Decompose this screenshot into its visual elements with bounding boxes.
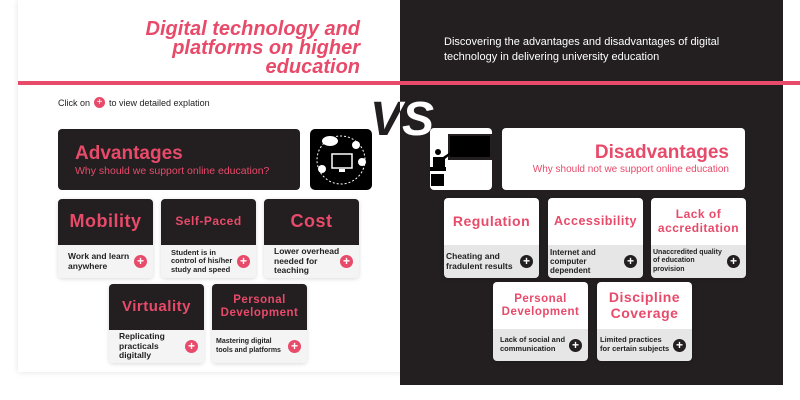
text: Cost (290, 211, 332, 231)
text: Unaccredited quality of education provision (653, 249, 722, 273)
VS: VS (370, 93, 434, 146)
disadvantages header (502, 128, 745, 190)
instruction: Click on to view detailed explation (58, 98, 210, 108)
dark panel (400, 0, 783, 385)
advantage cards: + (137, 254, 144, 268)
text: Replicating practicals digitally (119, 331, 165, 360)
advantage cards: Work and learn anywhere (68, 251, 129, 270)
text: Lower overhead needed for teaching (274, 246, 339, 275)
text: + (627, 254, 634, 268)
advantage cards (58, 199, 153, 278)
text: Limited practices for certain subjects (600, 335, 669, 353)
disadvantage cards: + (523, 254, 530, 268)
disadvantages header: Why should not we support online education (533, 164, 729, 175)
disadvantages header: Disadvantages (595, 142, 729, 163)
text: + (240, 254, 247, 268)
pink divider line (18, 81, 800, 85)
text: Self-Paced (175, 214, 242, 228)
text: Virtuality (122, 298, 191, 315)
VS: VS (370, 93, 434, 146)
text: Student is in control of his/her study and speed (171, 248, 232, 274)
text: Mastering digital tools and platforms (216, 338, 281, 354)
advantages header: Advantages (75, 143, 183, 164)
text: + (343, 254, 350, 268)
text: + (730, 254, 737, 268)
disadvantage cards: Cheating and fradulent results (446, 251, 513, 270)
text: Accessibility (554, 214, 637, 228)
text: + (676, 338, 683, 352)
text: Lack of accreditation (658, 207, 739, 234)
instruction: + (97, 97, 102, 108)
text: + (188, 339, 195, 353)
subtitle: Discovering the advantages and disadvantages of digital technology in delivering university education (444, 36, 719, 63)
advantages header: Why should we support online education? (75, 165, 269, 177)
text: Personal Development (502, 293, 579, 318)
text: Internet and computer dependent (550, 248, 596, 275)
text: + (572, 338, 579, 352)
disadvantage cards: Regulation (453, 213, 530, 229)
VS (374, 102, 434, 136)
left white panel shadow (18, 0, 403, 372)
icon: teacher (430, 128, 492, 190)
advantages header (58, 129, 300, 190)
advantage cards: Mobility (70, 211, 142, 231)
disadvantage cards (444, 198, 539, 278)
text: + (291, 339, 298, 353)
text: Personal Development (221, 294, 298, 319)
title: Digital technology and platforms on higher education (146, 18, 360, 78)
icon: technology (310, 129, 372, 190)
text: Lack of social and communication (500, 335, 565, 353)
text: Discipline Coverage (609, 289, 680, 320)
